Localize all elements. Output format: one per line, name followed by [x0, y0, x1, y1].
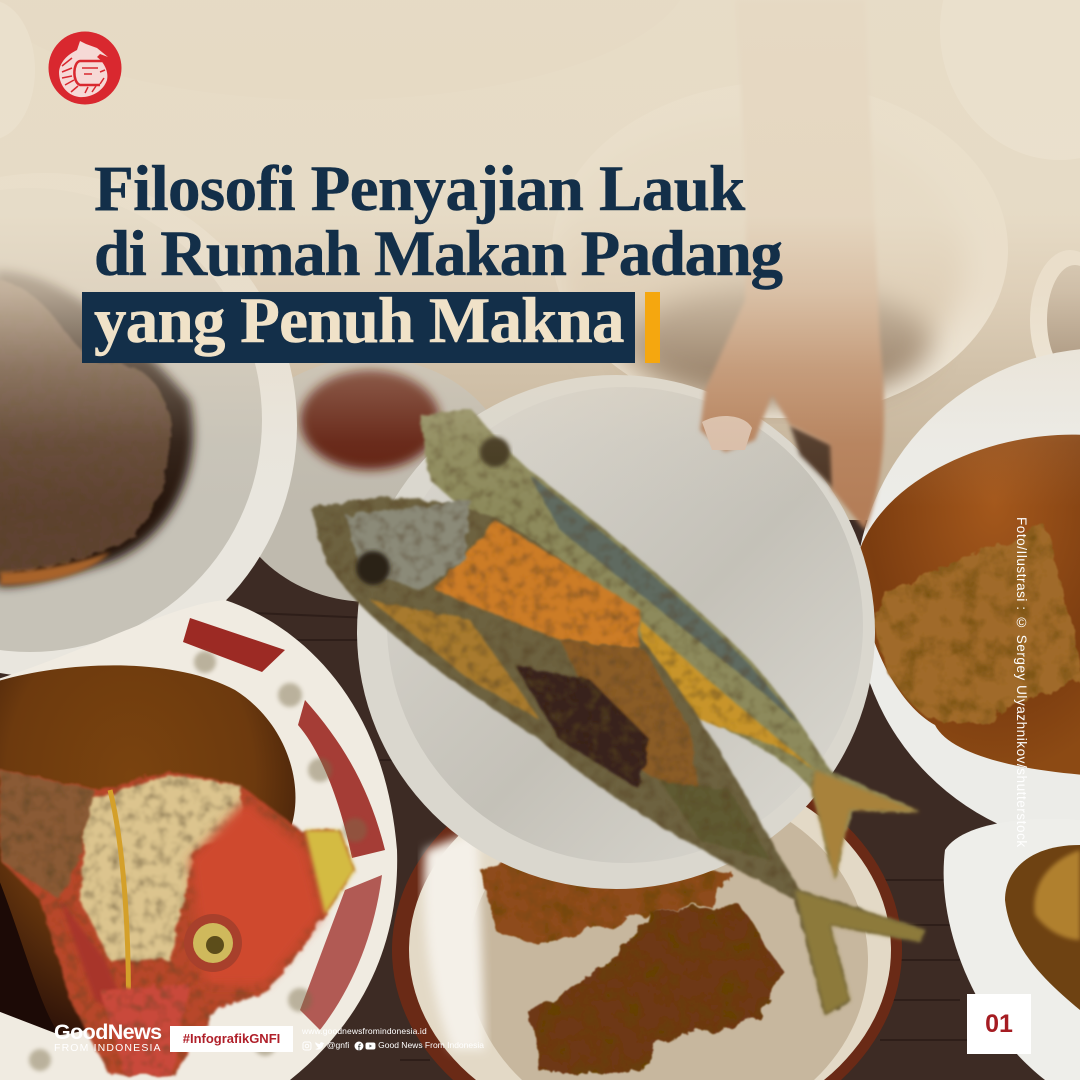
icon: youtube	[366, 1042, 376, 1050]
curry sauce	[0, 665, 295, 1035]
plate: left rendang	[0, 173, 297, 677]
icon: facebook	[354, 1042, 364, 1050]
title line 3: yang Penuh Makna	[94, 285, 624, 357]
accent bar	[645, 292, 660, 363]
hashtag badge	[170, 1026, 293, 1052]
top background plates	[0, 0, 1080, 602]
fish: lower mackerel	[312, 498, 925, 1015]
website and social handles	[302, 1026, 484, 1050]
fish: upper mackerel	[420, 408, 920, 880]
brand logo text: GoodNews	[54, 1020, 162, 1044]
page number badge	[967, 994, 1031, 1054]
brand logo text: FROM INDONESIA	[54, 1042, 162, 1054]
hand holding plate	[700, 0, 884, 530]
website and social handles: www.goodnewsfromindonesia.id	[302, 1026, 427, 1036]
website and social handles: @gnfi	[327, 1040, 349, 1050]
photo credit: Foto/Ilustrasi : © Sergey Ulyazhnikov/shutterstock	[1014, 517, 1029, 848]
icon: instagram	[302, 1042, 312, 1050]
title line 2: di Rumah Makan Padang	[94, 218, 782, 290]
icon: twitter	[315, 1042, 324, 1050]
website and social handles: Good News From Indonesia	[378, 1040, 484, 1050]
plate: bottom chicken plate	[392, 750, 902, 1080]
plate: central fish plate	[312, 375, 925, 1015]
title line 1: Filosofi Penyajian Lauk	[94, 153, 745, 225]
plate: bottom-right plate	[944, 819, 1080, 1080]
title highlight bar	[82, 292, 635, 363]
hashtag badge: #InfografikGNFI	[183, 1031, 280, 1046]
plate: right curry plate	[855, 348, 1080, 848]
plate: patterned fish-head plate	[0, 600, 397, 1080]
fish head	[0, 770, 355, 1075]
page number badge: 01	[985, 1010, 1013, 1038]
